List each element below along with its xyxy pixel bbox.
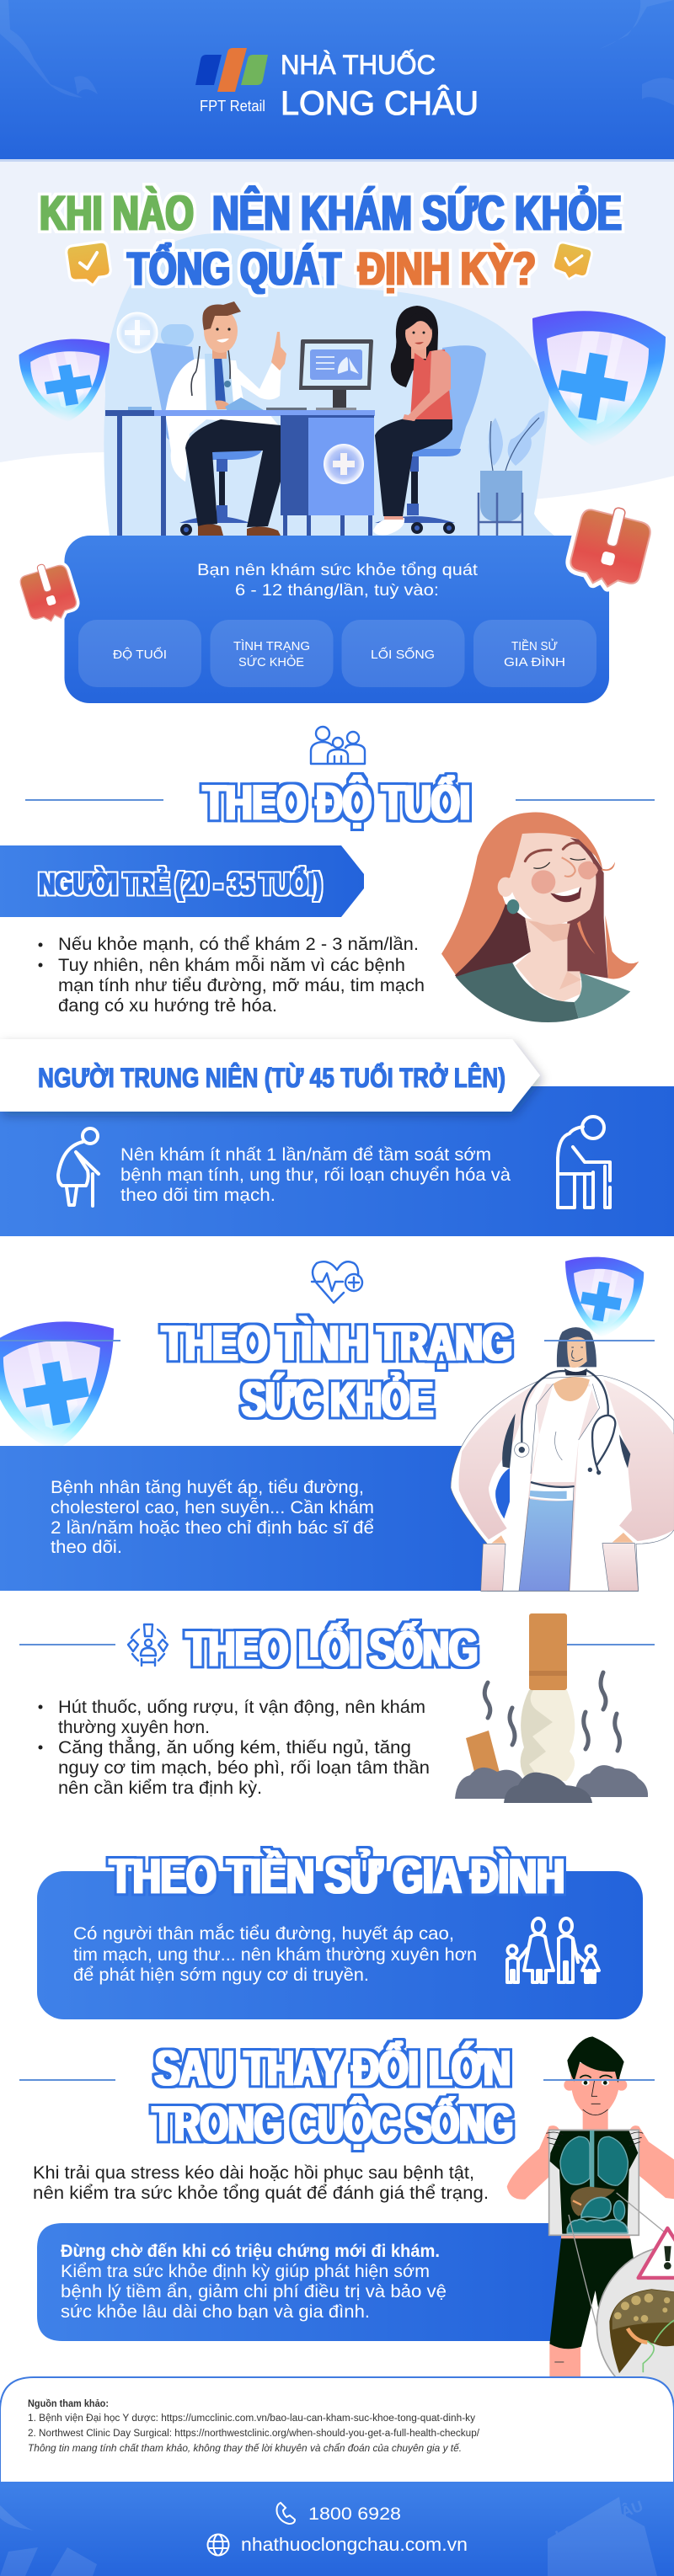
heading: theo tình trạng sức khỏe: [0, 1316, 655, 1427]
text block: middle age advice: [120, 1145, 511, 1205]
icon: yellow check badge right: [552, 243, 591, 281]
panel: health condition: [0, 1446, 516, 1591]
button: độ tuổi: ĐỘ TUỔI: [113, 647, 167, 662]
text block: callout: Đừng chờ đến khi có triệu chứng mới đi khám.: [61, 2242, 440, 2261]
text block: family history: [73, 1924, 477, 1985]
icon: group of people: [311, 727, 365, 764]
desk: [105, 397, 375, 536]
icon: yellow check badge left: [67, 243, 111, 286]
heading: sau thay đổi lớn trong cuộc sống: SAU THAY ĐỔI LỚN: [155, 2041, 511, 2096]
heading: sau thay đổi lớn trong cuộc sống: TRONG CUỘC SỐNG: [152, 2097, 513, 2152]
button: tình trạng sức khỏe: SỨC KHỎE: [238, 654, 304, 669]
footer band: [0, 2482, 674, 2576]
title: KHI NÀO: [40, 186, 194, 241]
glass bubble: [117, 312, 158, 353]
x-ray sheet: [546, 2130, 643, 2235]
illustration: doctor and patient at desk: [105, 301, 545, 536]
icon: family: [507, 1918, 599, 1982]
button: tiền sử gia đình: [473, 620, 596, 687]
intro text: Bạn nên khám sức khỏe tổng quát: [197, 562, 479, 579]
button: tiền sử gia đình: TIỀN SỬ: [511, 638, 558, 653]
text block: after major changes: nên kiểm tra sức khỏe tổng quát để đánh giá thể trạng.: [33, 2184, 489, 2203]
title: ĐỊNH KỲ?: [358, 242, 536, 295]
icon: heart with pulse: [312, 1261, 362, 1303]
icon: alert badge right: [567, 499, 655, 594]
decorative pharmacy store: [0, 2497, 657, 2576]
title: [40, 186, 622, 295]
text block: family history: tim mạch, ung thư... nên khám thường xuyên hơn: [73, 1945, 477, 1965]
text block: young adults: [39, 935, 425, 1016]
illustration: smiling woman: [441, 813, 639, 1022]
panel: references: 2. Northwest Clinic Day Surgical: https://northwestclinic.org/when-should-you-get-a-full-health-checkup/: [28, 2429, 480, 2439]
arms and head: [507, 2063, 674, 2376]
logo: FPT Retail Nhà thuốc Long Châu: [195, 48, 479, 122]
icon: elderly man with walker: [558, 1117, 610, 1208]
icon: elderly woman with cane: [58, 1128, 99, 1206]
icon: shield small right: [565, 1257, 644, 1336]
monitor: [266, 339, 373, 410]
heading: sau thay đổi lớn trong cuộc sống: [19, 2041, 655, 2152]
logo: FPT Retail Nhà thuốc Long Châu: LONG CHÂU: [281, 84, 479, 122]
ribbon: người trẻ: NGƯỜI TRẺ (20 - 35 TUỔI): [39, 865, 322, 901]
button: tình trạng sức khỏe: [211, 620, 334, 687]
text block: young adults: Tuy nhiên, nên khám mỗi năm vì các bệnh: [58, 956, 405, 975]
button: tình trạng sức khỏe: TÌNH TRẠNG: [233, 639, 310, 653]
heading: theo tiền sử gia đình: THEO TIỀN SỬ GIA ĐÌNH: [110, 1849, 564, 1904]
icon: shield left: [19, 339, 110, 422]
text block: lifestyle: Hút thuốc, uống rượu, ít vận động, nên khám: [58, 1698, 425, 1717]
intro text: [197, 562, 479, 600]
illustration: female doctor: [451, 1327, 674, 1591]
panel: middle age: [0, 1039, 674, 1236]
hero background: [0, 159, 674, 606]
button: độ tuổi: [78, 620, 201, 687]
intro text: 6 - 12 tháng/lần, tuỳ vào:: [235, 582, 439, 600]
panel: callout do not wait: [37, 2223, 573, 2341]
icon: lifestyle circle: [128, 1624, 168, 1666]
text block: health condition: Bệnh nhân tăng huyết áp, tiểu đường,: [51, 1478, 364, 1497]
text block: health condition: [51, 1478, 374, 1557]
icon: globe: [207, 2535, 229, 2555]
text block: young adults: Nếu khỏe mạnh, có thể khám 2 - 3 năm/lần.: [58, 935, 419, 954]
text block: health condition: 2 lần/năm hoặc theo chỉ định bác sĩ để: [51, 1518, 374, 1538]
icon: shield right: [532, 311, 666, 446]
logo: FPT Retail Nhà thuốc Long Châu: FPT Retail: [200, 98, 265, 115]
text block: middle age advice: Nên khám ít nhất 1 lần/năm để tầm soát sớm: [120, 1145, 491, 1165]
button: tiền sử gia đình: GIA ĐÌNH: [504, 655, 565, 669]
text block: lifestyle: Căng thẳng, ăn uống kém, thiếu ngủ, tăng: [58, 1737, 411, 1757]
panel: checkup frequency: [64, 536, 609, 703]
head: [557, 1327, 596, 1375]
patient chair: [375, 345, 486, 534]
icon: alert badge left: [17, 557, 79, 627]
text block: family history: Có người thân mắc tiểu đường, huyết áp cao,: [73, 1924, 454, 1944]
text block: callout: [61, 2242, 447, 2322]
decorative pharmacy store: LONG CHÂU: [553, 2497, 645, 2545]
ribbon: người trung niên: NGƯỜI TRUNG NIÊN (TỪ 45 TUỔI TRỞ LÊN): [38, 1063, 506, 1093]
button: lối sống: [342, 620, 465, 687]
phone number: 1800 6928: [308, 2504, 401, 2524]
ribbon: người trung niên: [0, 1039, 540, 1112]
icon: FPT stripes: [195, 48, 268, 92]
text block: lifestyle: nguy cơ tim mạch, béo phì, rối loạn tâm thần: [58, 1758, 430, 1778]
illustration: cigarette and ash: [455, 1613, 648, 1803]
button: lối sống: LỐI SỐNG: [371, 647, 435, 662]
text block: young adults: đang có xu hướng trẻ hóa.: [58, 996, 277, 1016]
panel: references: Nguồn tham khảo:: [28, 2399, 109, 2409]
text block: callout: Kiểm tra sức khỏe định kỳ giúp phát hiện sớm: [61, 2262, 430, 2281]
panel: references: 1. Bệnh viện Đại học Y dược: https://umcclinic.com.vn/bao-lau-can-kham-suc-khoe-tong-quat-dinh-ky: [28, 2413, 475, 2424]
logo: FPT Retail Nhà thuốc Long Châu: NHÀ THUỐC: [281, 50, 436, 80]
illustration backdrop blob: [104, 233, 554, 536]
plant: [479, 411, 545, 536]
text block: health condition: cholesterol cao, hen suyễn... Cần khám: [51, 1498, 374, 1517]
ribbon: người trẻ: [0, 845, 364, 917]
text block: health condition: theo dõi.: [51, 1538, 122, 1557]
text block: callout: sức khỏe lâu dài cho bạn và gia đình.: [61, 2302, 370, 2322]
heading: theo tình trạng sức khỏe: THEO TÌNH TRẠNG: [162, 1316, 512, 1371]
text block: family history: để phát hiện sớm nguy cơ di truyền.: [73, 1965, 369, 1985]
text block: lifestyle: thường xuyên hơn.: [58, 1718, 210, 1737]
panel: references: [0, 2377, 674, 2484]
header band: [0, 0, 674, 162]
panel: family history: [37, 1849, 643, 2019]
text block: lifestyle: [39, 1698, 430, 1798]
heading: theo lối sống: THEO LỐI SỐNG: [186, 1622, 478, 1677]
text block: middle age advice: theo dõi tim mạch.: [120, 1186, 275, 1205]
shorts: [549, 2238, 639, 2349]
text block: young adults: mạn tính như tiểu đường, mỡ máu, tim mạch: [58, 976, 425, 995]
text block: lifestyle: nên cần kiểm tra định kỳ.: [58, 1779, 262, 1798]
text block: callout: bệnh lý tiềm ẩn, giảm chi phí điều trị và bảo vệ: [61, 2282, 447, 2301]
illustration: man holding x-ray: [507, 2036, 674, 2406]
heading: theo tình trạng sức khỏe: SỨC KHỎE: [242, 1373, 433, 1427]
patient: [373, 306, 452, 535]
title: TỔNG QUÁT: [127, 242, 341, 295]
doctor: [165, 301, 286, 536]
website: nhathuoclongchau.com.vn: [241, 2534, 468, 2555]
text block: after major changes: [33, 2163, 489, 2203]
text block: after major changes: Khi trải qua stress kéo dài hoặc hồi phục sau bệnh tật,: [33, 2163, 474, 2183]
doctor chair: [150, 324, 263, 536]
heading: theo độ tuổi: THEO ĐỘ TUỔI: [203, 776, 470, 830]
icon: phone: [276, 2503, 295, 2524]
text block: middle age advice: bệnh mạn tính, ung thư, rối loạn chuyển hóa và: [120, 1165, 511, 1185]
icon: shield large left: [0, 1321, 114, 1450]
panel: references: Thông tin mang tính chất tham khảo, không thay thế lời khuyên và chẩn đoán của chuyên gia y tế.: [28, 2444, 462, 2454]
magnified liver with warning: [569, 2193, 674, 2406]
